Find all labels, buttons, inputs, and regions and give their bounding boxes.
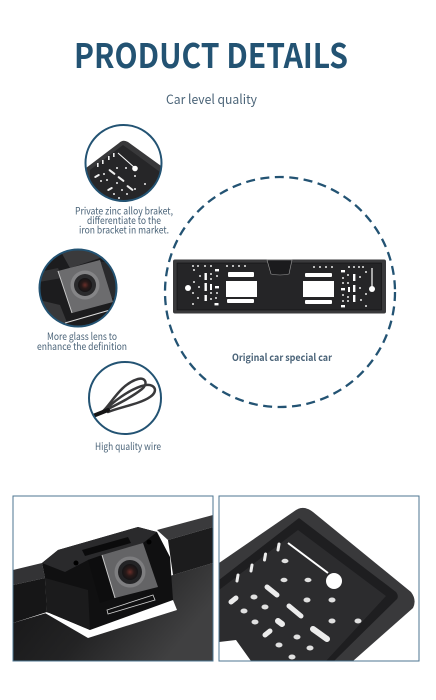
icon: glass lens circle bbox=[39, 250, 117, 330]
subtitle: Car level quality bbox=[166, 89, 257, 108]
caption: bracket bbox=[75, 202, 173, 236]
photo: bracket close-up bbox=[219, 496, 419, 661]
title: PRODUCT DETAILS bbox=[74, 29, 348, 78]
dashed circle bbox=[165, 177, 395, 407]
caption: plate: Original car special car bbox=[232, 349, 333, 364]
caption: wire: High quality wire bbox=[95, 438, 161, 453]
caption: bracket: Private zinc alloy braket, bbox=[75, 202, 173, 218]
caption: bracket: differentiate to the bbox=[87, 212, 161, 227]
icon: wire circle bbox=[89, 362, 161, 434]
photo: camera close-up bbox=[13, 496, 213, 661]
caption: bracket: iron bracket in market. bbox=[79, 222, 169, 236]
icon: zinc bracket circle bbox=[86, 125, 164, 205]
caption: lens: More glass lens to bbox=[47, 328, 117, 343]
caption: lens: enhance the definition bbox=[37, 338, 127, 353]
licence plate frame bbox=[173, 260, 386, 314]
caption: lens bbox=[37, 328, 127, 353]
